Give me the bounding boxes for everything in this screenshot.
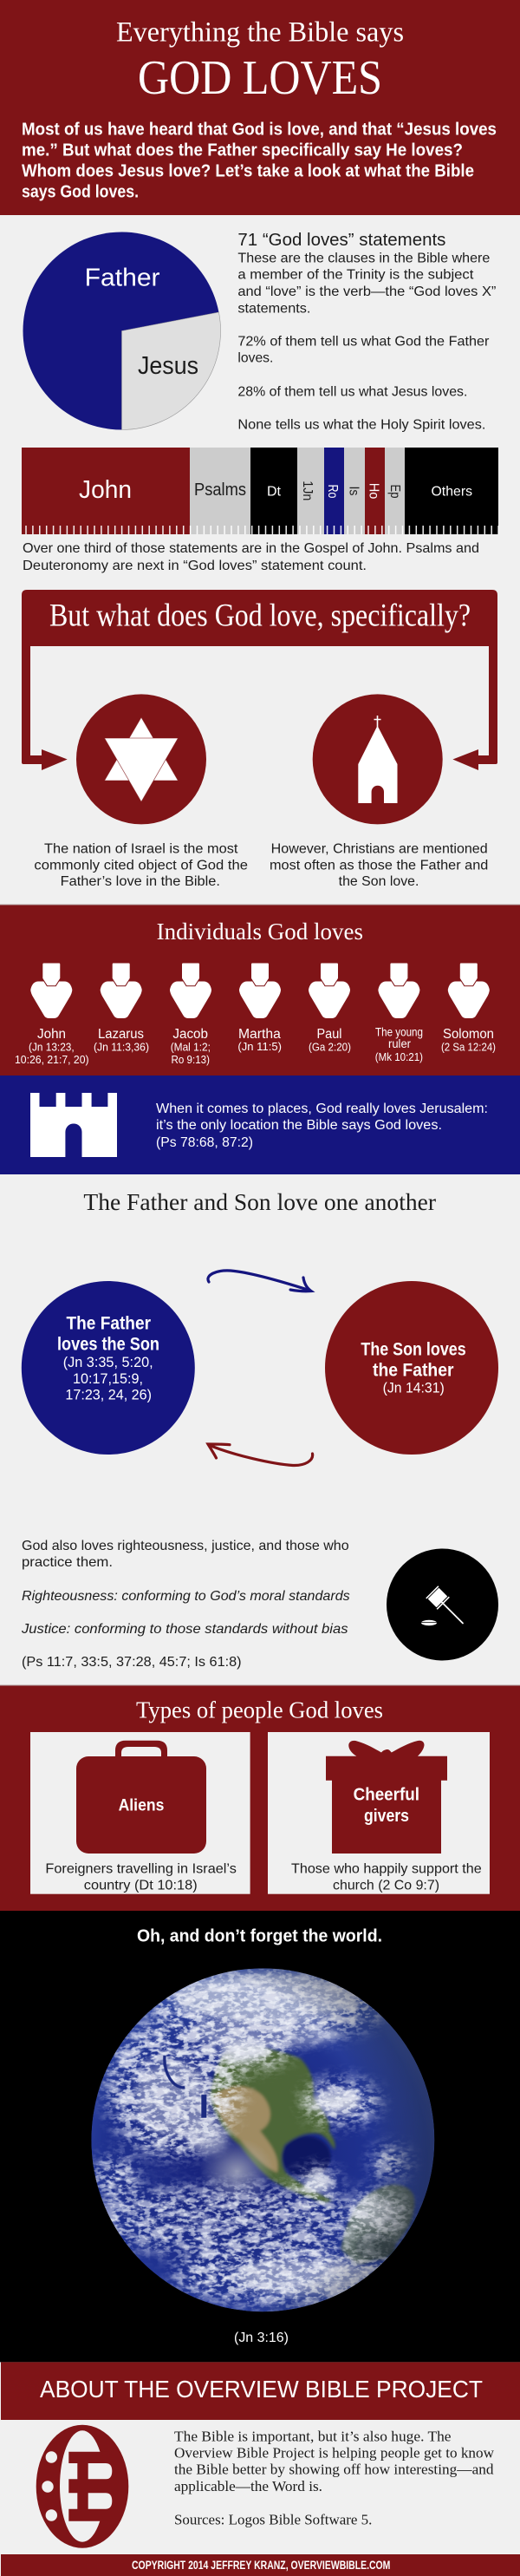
panel: about heading [0,2362,520,2420]
card: cheerful givers [268,1732,490,1894]
panel: individuals God loves [0,904,520,1076]
about text: Overview Bible Project is helping people get to know [174,2445,494,2462]
bar chart caption [23,541,479,573]
circle: the Father loves the Son: The Father [66,1313,151,1334]
person: Solomon [441,963,496,1054]
person: Jacob: Jacob [172,1027,208,1042]
panel: the world [0,1911,520,2363]
circle: the Father loves the Son: loves the Son [57,1335,159,1355]
intro paragraph: Whom does Jesus love? Let’s take a look at what the Bible [22,161,474,180]
person: Paul [309,963,351,1054]
intro paragraph: me.” But what does the Father specifically say He loves? [22,141,463,160]
caption: aliens: Foreigners travelling in Israel’s [45,1861,237,1876]
caption: aliens [45,1861,237,1893]
circle: the Son loves the Father: (Jn 14:31) [383,1379,445,1396]
bar chart: statements per book: John [79,476,132,504]
Jerusalem text: (Ps 78:68, 87:2) [156,1135,253,1150]
about text: Sources: Logos Bible Software 5. [174,2512,372,2528]
reference: John 3:16: (Jn 3:16) [234,2331,289,2345]
caption: givers [291,1861,482,1893]
circle: the Son loves the Father: The Son loves [361,1339,466,1359]
card: cheerful givers: Cheerful [354,1786,419,1805]
pie chart: Father vs Jesus [23,232,221,430]
caption: Israel: Father’s love in the Bible. [61,874,220,889]
caption: givers: church (2 Co 9:7) [333,1878,439,1893]
statement summary text: These are the clauses in the Bible where [237,252,490,266]
title: everything the Bible says: Everything the Bible says [116,17,404,49]
about text: applicable—the Word is. [174,2478,322,2494]
person: the young ruler: (Mk 10:21) [375,1050,423,1063]
about text: the Bible better by showing off how interesting—and [174,2462,494,2477]
bar chart: statements per book [22,448,498,534]
about text: The Bible is important, but it’s also huge. The [174,2429,451,2445]
circle: the Son loves the Father: the Father [373,1360,454,1381]
panel: types of people God loves [0,1684,520,1911]
bar chart: statements per book: Psalms [194,481,246,500]
footer [1,2554,520,2576]
caption: Israel: commonly cited object of God the [34,859,248,873]
person: Jacob [170,963,211,1066]
person: Martha [237,963,282,1053]
statement summary text: and “love” is the verb—the “God loves X” [237,284,496,299]
title: God loves: GOD LOVES [138,51,382,105]
statement summary text: 28% of them tell us what Jesus loves. [237,385,467,399]
banner with arrows [22,590,497,770]
bar chart: statements per book: Ep [387,484,402,499]
icon: star of David [76,694,206,824]
bar chart caption: Deuteronomy are next in “God loves” statement count. [23,559,367,573]
icon: church [313,694,443,824]
arrow: Son to Father [208,1444,313,1466]
person: the young ruler: The young [375,1026,423,1039]
caption: Christians: the Son love. [339,874,419,889]
person: Jacob: (Mal 1:2; [171,1041,211,1054]
heading: types of people: Types of people God loves [136,1697,383,1723]
statement summary text: 72% of them tell us what God the Father [237,334,490,349]
caption: Israel: The nation of Israel is the most [44,841,238,857]
person: John: 10:26, 21:7, 20) [15,1053,89,1066]
pie chart: Father vs Jesus: Jesus [138,352,198,380]
circle: the Father loves the Son: 17:23, 24, 26) [65,1386,152,1402]
icon: castle [30,1093,117,1157]
person: Jacob: Ro 9:13) [172,1053,210,1066]
person: Paul: (Ga 2:20) [309,1041,351,1054]
arrow: Father to Son [208,1271,311,1291]
person: Martha: (Jn 11:5) [237,1040,282,1053]
caption: Christians: most often as those the Father and [270,859,488,873]
intro paragraph: Most of us have heard that God is love, and that “Jesus loves [22,120,497,139]
person: Solomon: Solomon [443,1027,494,1042]
person: John: (Jn 13:23, [29,1041,75,1054]
caption: Israel [34,841,248,889]
image: earth [87,1960,442,2316]
icon: gift [326,1741,447,1854]
circle: the Father loves the Son: 10:17,15:9, [73,1370,143,1387]
card: aliens: Aliens [119,1797,164,1815]
caption: Christians: However, Christians are mentioned [271,841,488,857]
statement summary text: loves. [237,350,273,366]
text: righteousness and justice: God also loves righteousness, justice, and those who [22,1539,349,1553]
statement summary text: None tells us what the Holy Spirit loves. [237,418,485,433]
icon: Overview Bible logo [36,2425,128,2548]
panel: Jerusalem [0,1076,520,1174]
about text [174,2429,494,2528]
person: Lazarus [94,963,149,1054]
statement summary text: a member of the Trinity is the subject [237,268,474,283]
Jerusalem text: When it comes to places, God really loves Jerusalem: [156,1102,488,1116]
person: the young ruler [375,963,423,1063]
panel: about heading: ABOUT THE OVERVIEW BIBLE PROJECT [40,2376,483,2403]
card: aliens [30,1732,250,1894]
person: John [15,963,89,1066]
statement summary text: 71 “God loves” statements [237,231,445,250]
footer: COPYRIGHT 2014 JEFFREY KRANZ, OVERVIEWBIBLE.COM [132,2559,390,2572]
bar chart: statements per book: 1Jn [300,481,315,500]
Jerusalem text: it’s the only location the Bible says God loves. [156,1118,442,1133]
person: Lazarus: (Jn 11:3,36) [94,1041,149,1054]
person: Paul: Paul [317,1027,341,1042]
person: Martha: Martha [238,1027,281,1042]
intro paragraph: says God loves. [22,182,139,201]
text: righteousness and justice [21,1539,350,1670]
person: Solomon: (2 Sa 12:24) [441,1041,496,1054]
heading: individuals: Individuals God loves [157,919,363,945]
text: righteousness and justice: Justice: conforming to those standards without bias [21,1622,348,1637]
person: John: John [37,1027,66,1042]
person: Lazarus: Lazarus [98,1027,144,1042]
icon: suitcase [115,1741,167,1756]
heading: Father and Son: The Father and Son love one another [83,1189,436,1215]
bar chart: statements per book: Is [347,486,361,496]
heading: the world: Oh, and don’t forget the world. [137,1927,382,1946]
bar chart: statements per book: Dt [267,484,282,500]
bar chart caption: Over one third of those statements are in the Gospel of John. Psalms and [23,541,479,556]
statement summary text: statements. [237,302,310,317]
caption: aliens: country (Dt 10:18) [84,1878,198,1893]
intro paragraph [22,120,497,201]
text: righteousness and justice: Righteousness: conforming to God’s moral standards [22,1589,350,1604]
bar chart: statements per book: Others [432,484,472,500]
card: cheerful givers: givers [364,1807,409,1826]
Jerusalem text [156,1102,488,1150]
person: the young ruler: ruler [388,1037,411,1050]
bar chart: statements per book: Ho [367,483,381,499]
circle: the Father loves the Son [22,1281,195,1455]
header panel [0,0,520,215]
bar chart: statements per book: Ro [325,484,340,499]
circle: the Father loves the Son: (Jn 3:35, 5:20, [63,1354,153,1370]
caption: givers: Those who happily support the [291,1861,482,1876]
text: righteousness and justice: (Ps 11:7, 33:5, 37:28, 45:7; Is 61:8) [22,1655,242,1670]
statement summary text [237,231,496,433]
pie chart: Father vs Jesus: Father [85,264,160,291]
circle: the Son loves the Father [325,1281,498,1455]
icon: gavel [387,1549,498,1660]
caption: Christians [270,841,488,889]
text: righteousness and justice: practice them. [22,1555,113,1570]
